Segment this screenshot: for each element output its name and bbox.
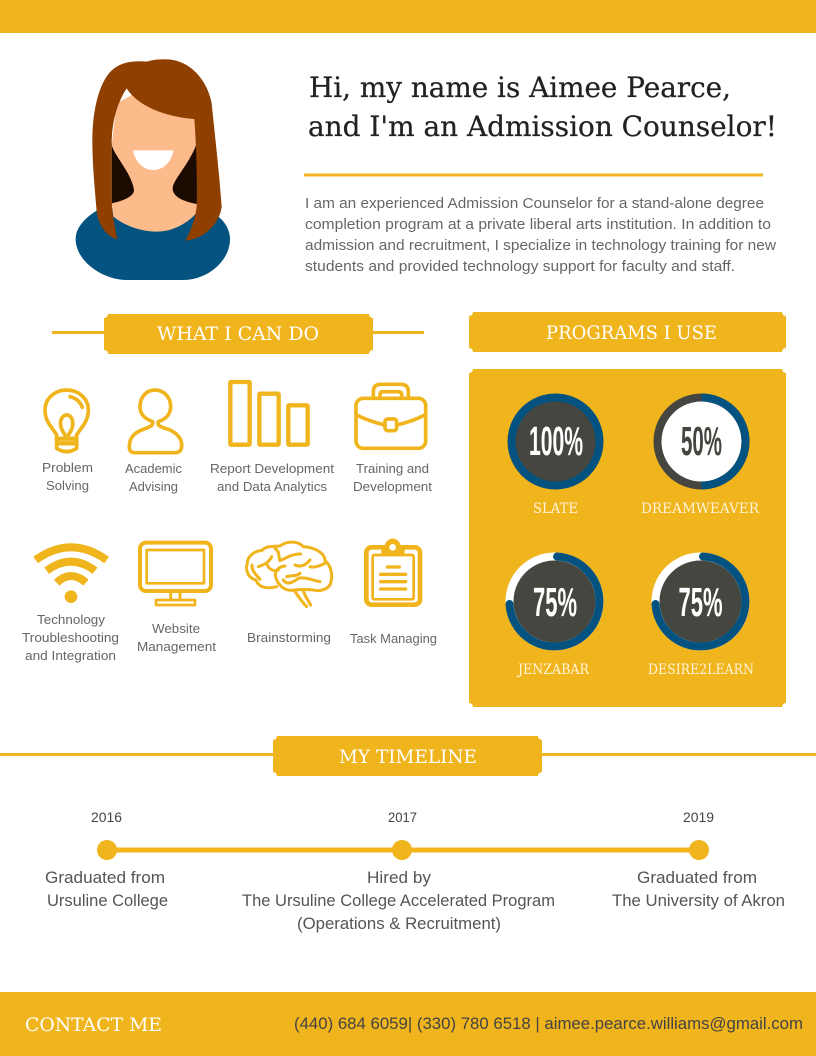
event: 2017: Hired by <box>367 868 431 887</box>
event: 2019: 2019 <box>683 810 714 825</box>
skill: problem solving: Solving <box>46 478 89 493</box>
skill: training and development: Training and <box>356 461 429 476</box>
skill: academic advising <box>125 390 182 494</box>
intro paragraph: admission and recruitment, I specialize in technology training for new <box>305 238 777 254</box>
event: 2016: Ursuline College <box>47 891 168 910</box>
gauge: dreamweaver 50%: 50% <box>681 418 722 464</box>
panel: programs <box>469 369 786 707</box>
gauge: dreamweaver 50% <box>641 398 760 517</box>
gauge: slate 100% <box>512 398 600 517</box>
gauge: desire2learn 75% <box>648 556 754 678</box>
event: 2019: The University of Akron <box>612 891 785 910</box>
icon: person <box>129 390 182 453</box>
skill: website management: Management <box>137 639 216 654</box>
skill: problem solving <box>42 390 93 493</box>
icon: light bulb <box>45 390 88 452</box>
gauge: jenzabar 75% <box>510 556 600 678</box>
event: 2016 <box>45 810 168 910</box>
gauge: jenzabar 75%: 75% <box>533 579 577 625</box>
skill: website management: Website <box>152 621 200 636</box>
skill: technology troubleshooting: and Integration <box>25 648 116 663</box>
skill: technology troubleshooting: Technology <box>37 612 106 627</box>
skill: task managing: Task Managing <box>350 631 437 646</box>
title <box>308 71 777 143</box>
event: 2017: (Operations & Recruitment) <box>297 914 501 933</box>
skill: technology troubleshooting <box>22 547 119 663</box>
gauge: desire2learn 75%: DESIRE2LEARN <box>648 662 754 678</box>
event: 2017: The Ursuline College Accelerated Program <box>242 891 555 910</box>
gauge: jenzabar 75%: JENZABAR <box>516 662 590 678</box>
event: 2016: 2016 <box>91 810 122 825</box>
avatar illustration <box>76 59 230 280</box>
gauge: slate 100%: SLATE <box>533 501 578 517</box>
icon: brain <box>247 542 332 607</box>
heading: my timeline <box>0 736 816 776</box>
event: 2019: Graduated from <box>637 868 757 887</box>
gauge: slate 100%: 100% <box>529 418 583 464</box>
icon: briefcase <box>356 384 426 448</box>
icon: monitor <box>140 543 211 605</box>
heading: my timeline: MY TIMELINE <box>339 747 477 768</box>
gauge: dreamweaver 50%: DREAMWEAVER <box>641 501 760 517</box>
intro paragraph: students and provided technology support for faculty and staff. <box>305 259 735 275</box>
skill: academic advising: Academic <box>125 461 182 476</box>
skill: report development: and Data Analytics <box>217 479 327 494</box>
top banner <box>0 0 816 33</box>
skill: training and development <box>353 384 432 494</box>
skill: website management <box>137 543 216 654</box>
gauge: desire2learn 75%: 75% <box>678 579 722 625</box>
heading: what I can do: WHAT I CAN DO <box>157 324 319 345</box>
event: 2017 <box>242 810 555 933</box>
footer: contact: CONTACT ME <box>25 1015 162 1036</box>
skill: task managing <box>350 539 437 646</box>
skill: report development: Report Development <box>210 461 334 476</box>
intro paragraph <box>305 196 777 275</box>
skill: technology troubleshooting: Troubleshooting <box>22 630 119 645</box>
skill: problem solving: Problem <box>42 460 93 475</box>
skill: brainstorming: Brainstorming <box>247 630 331 645</box>
heading: programs I use <box>469 312 786 352</box>
title: and I'm an Admission Counselor! <box>308 110 777 143</box>
icon: clipboard <box>366 539 420 605</box>
heading: programs I use: PROGRAMS I USE <box>546 323 717 344</box>
heading: what I can do <box>52 314 424 354</box>
title: Hi, my name is Aimee Pearce, <box>309 71 731 104</box>
skill: academic advising: Advising <box>129 479 178 494</box>
event: 2016: Graduated from <box>45 868 165 887</box>
skill: brainstorming <box>247 542 332 645</box>
event: 2017: 2017 <box>388 810 417 825</box>
footer: contact <box>0 992 816 1056</box>
skill: training and development: Development <box>353 479 432 494</box>
icon: bar chart <box>230 382 308 445</box>
footer: contact: (440) 684 6059| (330) 780 6518 | aimee.pearce.williams@gmail.com <box>294 1014 803 1033</box>
skill: report development <box>210 382 334 494</box>
icon: wifi <box>36 547 107 603</box>
intro paragraph: completion program at a private liberal arts institution. In addition to <box>305 217 771 233</box>
event: 2019 <box>612 810 785 910</box>
intro paragraph: I am an experienced Admission Counselor for a stand-alone degree <box>305 196 764 212</box>
timeline <box>45 810 785 933</box>
